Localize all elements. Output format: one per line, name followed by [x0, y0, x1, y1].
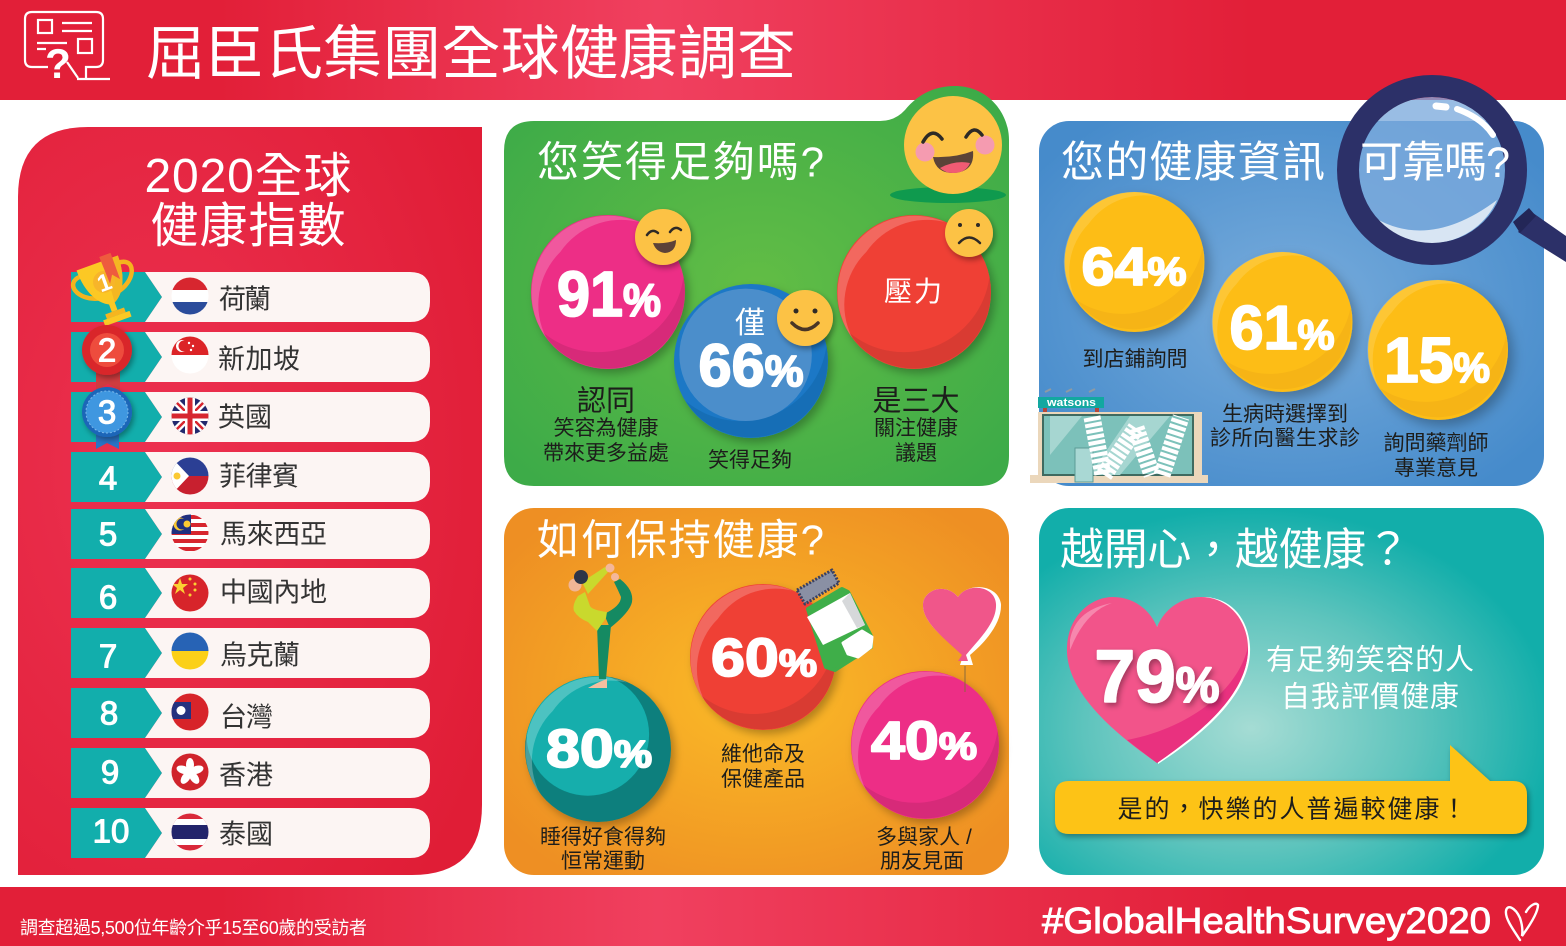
rank 8: Taiwan: 8	[100, 694, 118, 732]
heading: is your health information reliable	[1061, 139, 1510, 187]
icon: red medal rank 2	[82, 325, 132, 390]
rank 9: Hong Kong	[71, 748, 430, 798]
hashtag: #GlobalHealthSurvey2020	[1042, 900, 1491, 941]
heading: is your health information reliable: 可靠嗎?	[1360, 139, 1510, 187]
panel: how to stay healthy	[504, 508, 1009, 875]
caption: agree smiles bring health benefits	[543, 385, 669, 465]
rank 8: Taiwan	[71, 688, 430, 738]
title: 屈臣氏集團全球健康調查	[146, 21, 796, 87]
stat: 91 percent: 91%	[557, 258, 661, 330]
stat: 64 percent in store	[1064, 192, 1204, 371]
caption: agree smiles bring health benefits: 帶來更多益處	[543, 442, 669, 465]
stat: 40 percent family and friends: 40%	[871, 711, 977, 771]
panel: the happier the healthier	[1039, 508, 1544, 875]
rank 3: United Kingdom: 英國	[218, 402, 272, 432]
text: people with enough smiles rate their health: 有足夠笑容的人	[1266, 643, 1474, 676]
stat: 60 percent vitamins	[690, 570, 872, 791]
stat: 79 percent heart	[1067, 597, 1250, 764]
caption: smile enough: 笑得足夠	[708, 449, 792, 472]
survey note: 調查超過5,500位年齡介乎15至60歲的受訪者	[20, 918, 367, 938]
icon: watsons heart tick	[1506, 904, 1538, 940]
stat: 91 percent	[531, 209, 691, 369]
stat: 80 percent sleep and exercise: 睡得好食得夠	[540, 826, 666, 849]
rank 4: Philippines	[71, 452, 430, 502]
stat: 15 percent ask pharmacist: 專業意見	[1394, 457, 1478, 480]
stat: 66 percent	[674, 284, 833, 438]
stat: 80 percent sleep and exercise: 恒常運動	[561, 850, 645, 873]
icon: smile emoji	[777, 290, 833, 346]
stat: 61 percent see a doctor: 生病時選擇到	[1222, 403, 1348, 426]
icon: blue rosette rank 3: 3	[98, 394, 116, 430]
icon: vitamin bottle and capsule	[797, 570, 872, 670]
heading: do you smile enough: 您笑得足夠嗎?	[537, 139, 824, 186]
rank 1: Netherlands: 荷蘭	[219, 284, 271, 314]
rank 8: Taiwan: 台灣	[220, 702, 273, 732]
heading: 2020 global health index: 健康指數	[150, 200, 346, 253]
caption: agree smiles bring health benefits: 認同	[577, 385, 635, 418]
icon: grin emoji	[635, 209, 691, 265]
icon: gold trophy rank 1	[67, 248, 147, 332]
rank 7: Ukraine	[71, 628, 430, 678]
rank 6: Mainland China: 6	[99, 578, 117, 616]
rank 10: Thailand: 泰國	[219, 819, 273, 849]
icon: sad emoji	[945, 209, 993, 257]
rank 9: Hong Kong: 9	[101, 754, 119, 790]
stat: 79 percent heart: 79%	[1094, 635, 1220, 718]
stat: 66 percent: 僅	[735, 307, 765, 340]
rank 5: Malaysia: 馬來西亞	[220, 519, 327, 549]
rank 2: Singapore: 新加坡	[218, 344, 300, 374]
stat: 61 percent see a doctor: 診所向醫生求診	[1210, 427, 1360, 450]
icon: yoga figure	[568, 564, 632, 688]
caption: top three health concerns: 是三大	[872, 385, 960, 418]
rank 9: Hong Kong: 香港	[219, 760, 273, 790]
heading: 2020 global health index	[144, 150, 352, 253]
heading: the happier the healthier: 越開心，越健康？	[1060, 526, 1410, 575]
stat: 40 percent family and friends	[851, 587, 1001, 873]
stat: 80 percent sleep and exercise	[525, 673, 671, 873]
stat: 64 percent in store: 64%	[1082, 237, 1186, 297]
heading: is your health information reliable: 您的健康資訊	[1061, 139, 1325, 187]
stat: 40 percent family and friends: 朋友見面	[880, 850, 964, 873]
stat: 15 percent ask pharmacist: 詢問藥劑師	[1384, 432, 1488, 455]
callout: happy people are generally healthier: 是的，快樂的人普遍較健康！	[1118, 796, 1466, 824]
icon: watsons store: watsons	[1046, 397, 1096, 409]
stat: 60 percent vitamins: 60%	[711, 628, 817, 688]
icon: red medal rank 2: 2	[98, 332, 116, 368]
stat: 15 percent ask pharmacist: 15%	[1384, 324, 1490, 396]
rank 6: Mainland China: 中國內地	[220, 577, 327, 607]
rank 6: Mainland China	[71, 568, 430, 618]
stat: 60 percent vitamins: 保健產品	[721, 768, 805, 791]
stat: stress	[837, 209, 993, 369]
rank 5: Malaysia: 5	[99, 516, 117, 552]
rank 10: Thailand: 10	[93, 812, 129, 850]
panel: do you smile enough	[504, 86, 1009, 486]
heading: 2020 global health index: 2020全球	[144, 150, 352, 203]
text: people with enough smiles rate their health: 自我評價健康	[1281, 680, 1459, 713]
rank 5: Malaysia	[71, 509, 430, 559]
stat: stress: 壓力	[884, 276, 942, 307]
stat: 15 percent ask pharmacist	[1367, 280, 1508, 480]
icon: big laughing face	[890, 96, 1006, 203]
rank 7: Ukraine: 烏克蘭	[220, 640, 300, 670]
caption: top three health concerns	[872, 385, 960, 465]
rank 10: Thailand	[71, 808, 430, 858]
rank 3: United Kingdom	[71, 392, 430, 442]
caption: top three health concerns: 關注健康	[874, 417, 958, 440]
panel: is your health information reliable	[1030, 86, 1566, 486]
stat: 61 percent see a doctor	[1210, 252, 1360, 450]
icon: blue rosette rank 3	[82, 387, 132, 449]
icon: survey speech bubble with question mark	[25, 12, 110, 87]
rank 1: Netherlands	[71, 272, 430, 322]
panel: 2020 global health index	[18, 127, 482, 875]
icon: watsons store	[1030, 389, 1208, 483]
stat: 80 percent sleep and exercise: 80%	[546, 719, 652, 779]
rank 2: Singapore	[71, 332, 430, 382]
heading: how to stay healthy: 如何保持健康?	[537, 517, 824, 564]
caption: agree smiles bring health benefits: 笑容為健康	[554, 417, 658, 440]
text: people with enough smiles rate their health	[1266, 643, 1474, 713]
rank 4: Philippines: 4	[99, 460, 117, 496]
stat: 64 percent in store: 到店鋪詢問	[1082, 348, 1188, 371]
icon: heart balloon	[923, 587, 1001, 692]
icon: survey speech bubble with question mark: ?	[45, 40, 71, 87]
callout: happy people are generally healthier	[1055, 745, 1527, 834]
stat: 60 percent vitamins: 維他命及	[721, 743, 805, 766]
icon: gold trophy rank 1: 1	[94, 268, 115, 298]
caption: top three health concerns: 議題	[895, 442, 937, 465]
header bar	[0, 0, 1566, 100]
stat: 66 percent: 66%	[698, 332, 804, 399]
stat: 40 percent family and friends: 多與家人 /	[876, 826, 972, 849]
rank 4: Philippines: 菲律賓	[219, 461, 299, 491]
footer bar	[0, 887, 1566, 946]
rank 7: Ukraine: 7	[99, 638, 117, 674]
icon: magnifying glass	[1348, 86, 1566, 262]
stat: 61 percent see a doctor: 61%	[1230, 294, 1334, 363]
